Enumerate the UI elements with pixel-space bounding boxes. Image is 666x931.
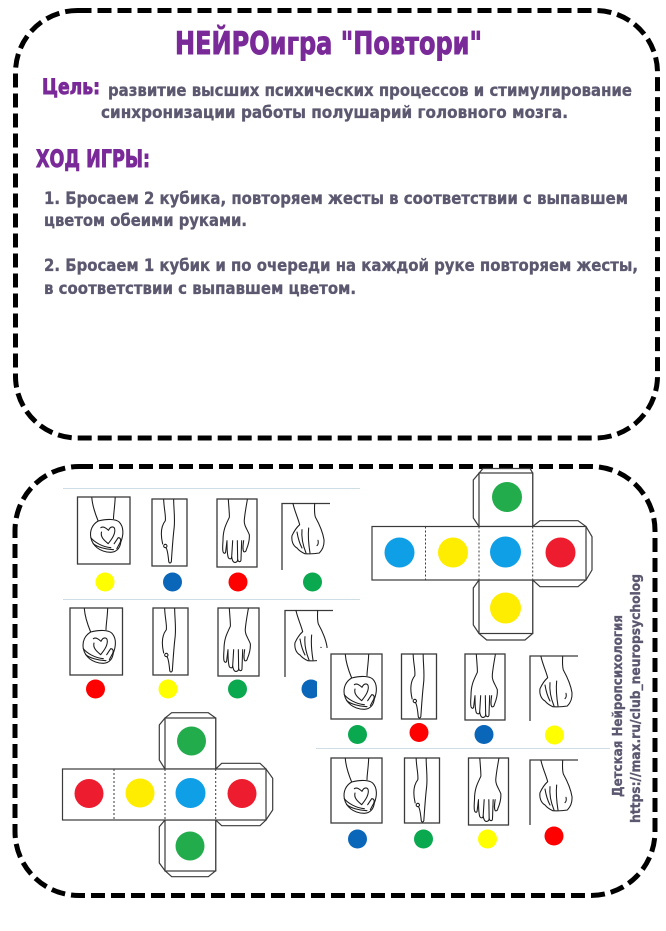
panel: game materials card — [15, 466, 655, 896]
dice net: bottom left — [62, 713, 273, 877]
goal text — [101, 81, 632, 123]
panel: instructions card — [16, 10, 658, 438]
card dashed border — [16, 10, 658, 438]
gesture row 3 — [331, 654, 578, 744]
vertical credit text — [610, 574, 644, 823]
step 1: цветом обеими руками. — [44, 211, 247, 231]
goal text: синхронизации работы полушарий головного мозга. — [101, 103, 568, 123]
card dashed border — [15, 466, 655, 896]
goal label: Цель: — [42, 75, 100, 99]
vertical credit text: https://max.ru/club_neuropsycholog — [628, 574, 644, 823]
step 2 — [44, 256, 638, 299]
step 2: в соответствии с выпавшем цветом. — [44, 279, 356, 299]
vertical credit text: Детская Нейропсихология — [610, 615, 626, 797]
gesture row 4 — [331, 758, 578, 848]
step 1 — [44, 189, 628, 231]
gesture row 1 — [78, 497, 330, 592]
gesture sheet: top left — [63, 488, 360, 698]
title: НЕЙРОигра "Повтори" — [175, 26, 482, 62]
dice net: top right — [372, 468, 592, 640]
section heading: game flow: ХОД ИГРЫ: — [36, 145, 150, 173]
gesture sheet: bottom right — [316, 648, 612, 848]
gesture row 2 — [70, 608, 333, 698]
